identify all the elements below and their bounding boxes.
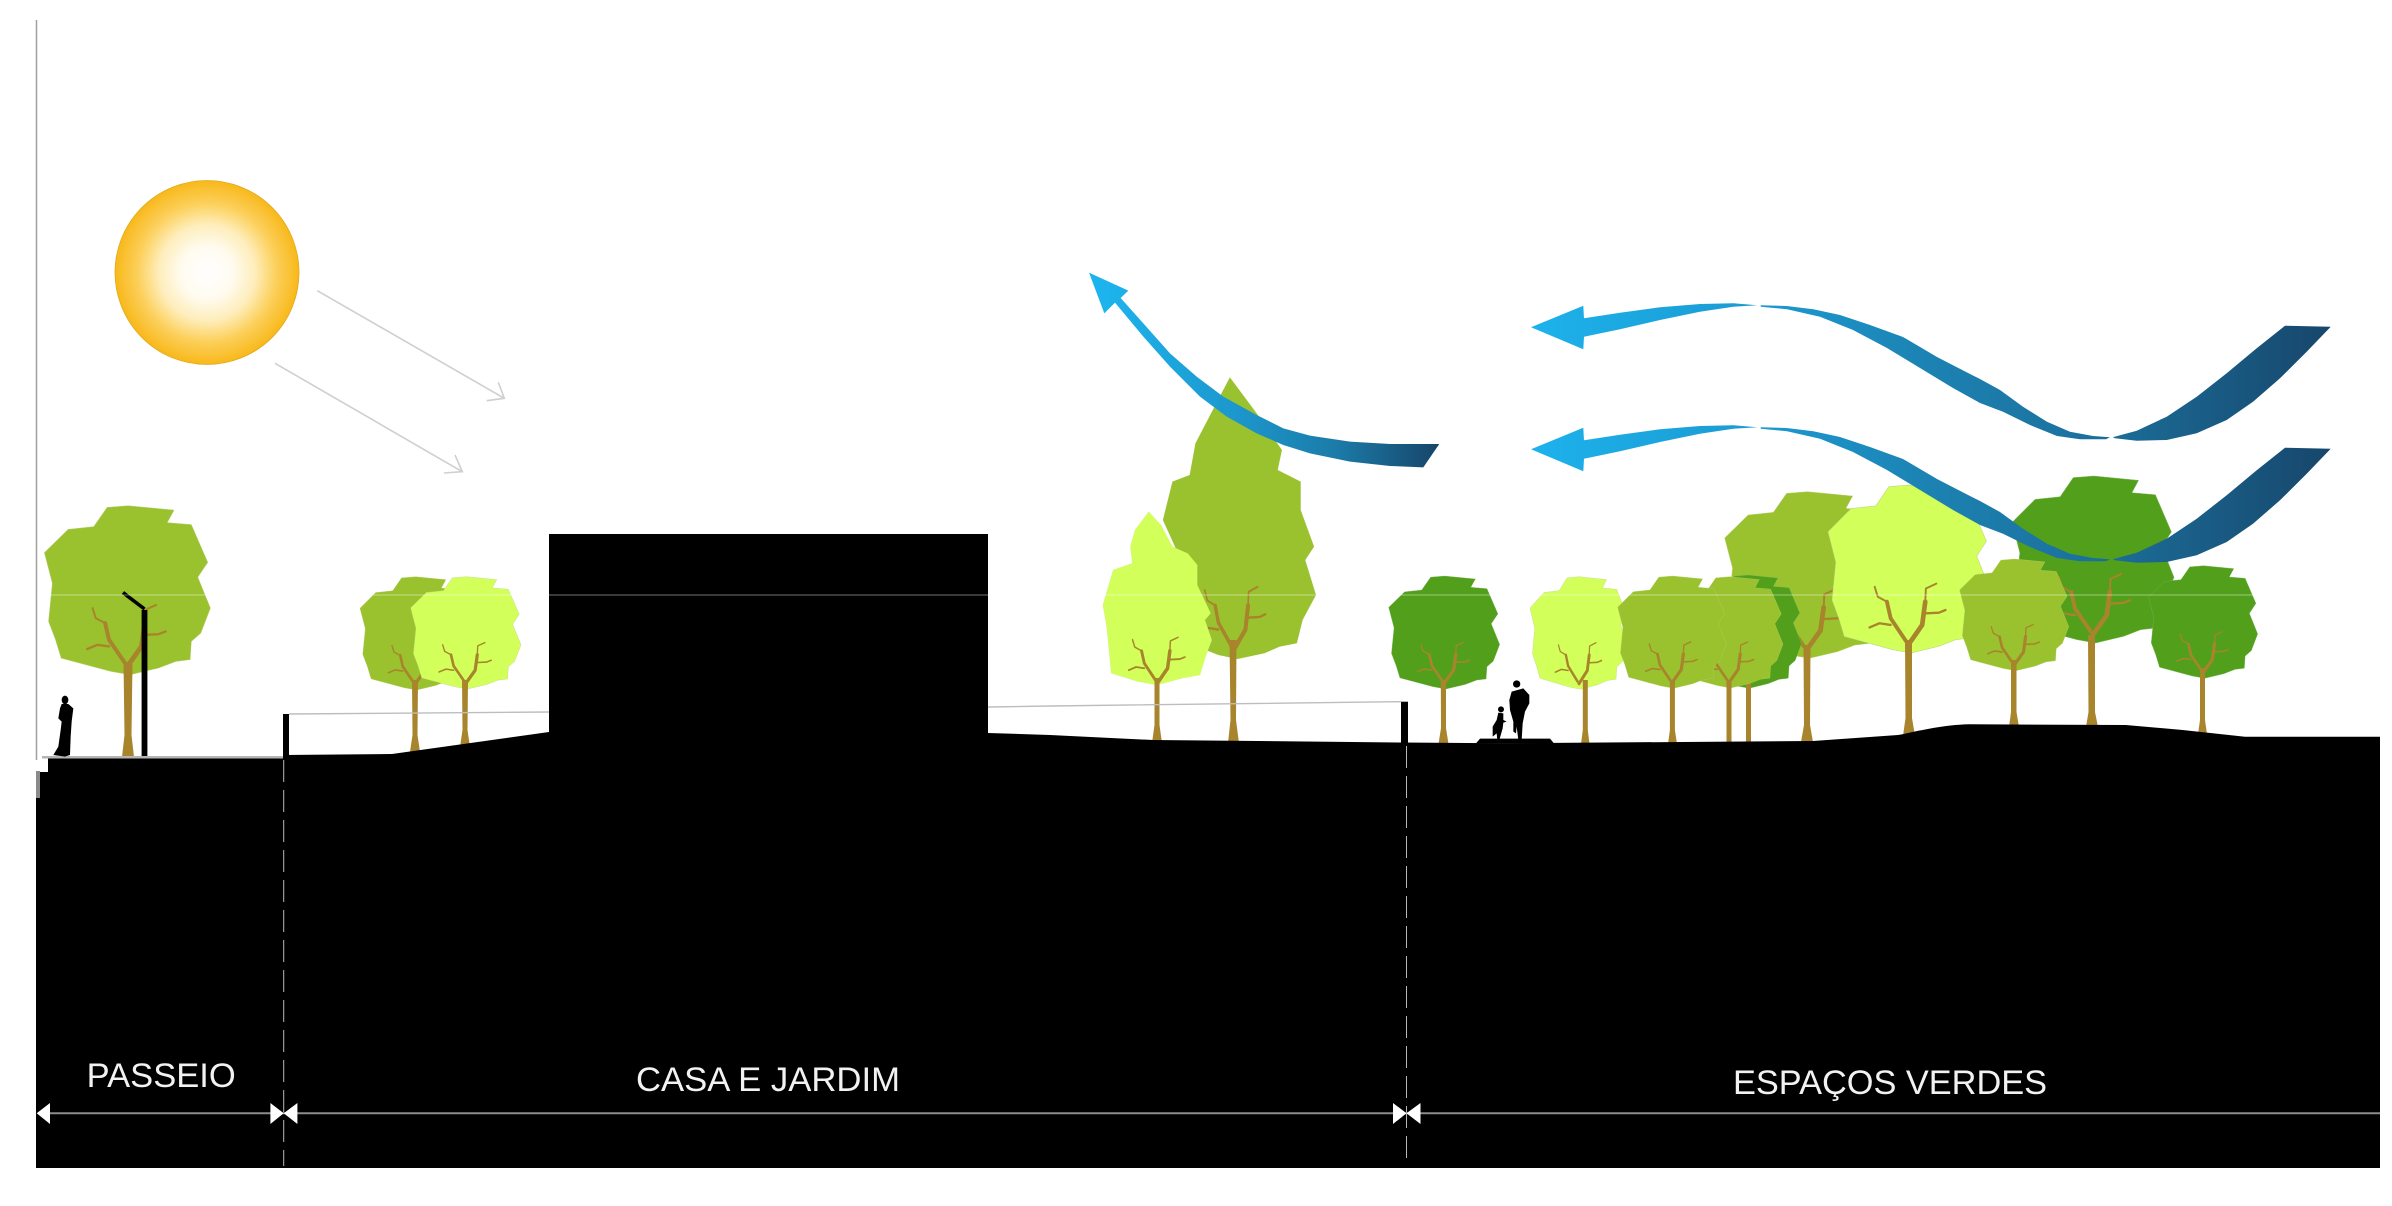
label: casa e jardim: CASA E JARDIM bbox=[636, 1061, 900, 1099]
dimension line with arrows bbox=[37, 1103, 2380, 1124]
street lamp bbox=[123, 592, 147, 756]
dashed divider: casa / espaços verdes bbox=[1406, 746, 1408, 1166]
tree: light at left bbox=[1530, 577, 1628, 744]
frame line: left edge bbox=[36, 20, 38, 760]
arrow: wind rising over tree bbox=[1089, 273, 1439, 467]
sidewalk edge detail bbox=[36, 756, 283, 798]
wall post: right bbox=[1401, 702, 1408, 744]
tree: medium on the mound bbox=[1960, 559, 2069, 727]
tree: medium small bbox=[1675, 577, 1783, 743]
tree: large dark back bbox=[2012, 476, 2174, 727]
ground and house section bbox=[36, 534, 2380, 1168]
faint horizontal scan line bbox=[37, 594, 2380, 596]
arrow: upper wind stream bbox=[1531, 303, 2331, 441]
arrow: upper sun ray bbox=[317, 291, 504, 401]
tree group: green spaces bbox=[1530, 476, 2258, 744]
tree: garden light green bbox=[411, 577, 521, 747]
label: espaços verdes: ESPAÇOS VERDES bbox=[1733, 1064, 2047, 1102]
tree: garden medium green bbox=[360, 577, 470, 752]
label: passeio: PASSEIO bbox=[87, 1057, 236, 1095]
tree: tall light green bbox=[1103, 512, 1212, 743]
line: garden fence top, left bbox=[289, 712, 549, 714]
tree: sidewalk tree bbox=[44, 506, 210, 757]
arrow: lower sun ray bbox=[275, 363, 462, 473]
tree: large light bbox=[1828, 485, 1989, 736]
icon: sun bbox=[115, 180, 299, 364]
tree: dark green by the fence bbox=[1389, 576, 1500, 744]
person: man on sidewalk bbox=[53, 696, 73, 757]
tree: dark behind bbox=[1693, 575, 1802, 743]
wall post: left bbox=[283, 714, 289, 758]
line: garden fence top, right bbox=[988, 702, 1401, 707]
tree: tall medium back bbox=[1725, 492, 1888, 742]
people: adult and child walking bbox=[1476, 680, 1554, 743]
dashed divider: passeio / casa bbox=[283, 760, 285, 1166]
tree: medium left bbox=[1618, 576, 1726, 744]
arrow: lower wind stream bbox=[1531, 425, 2331, 563]
tree: tall medium green bbox=[1163, 377, 1316, 743]
tree: dark at right bbox=[2148, 566, 2258, 734]
